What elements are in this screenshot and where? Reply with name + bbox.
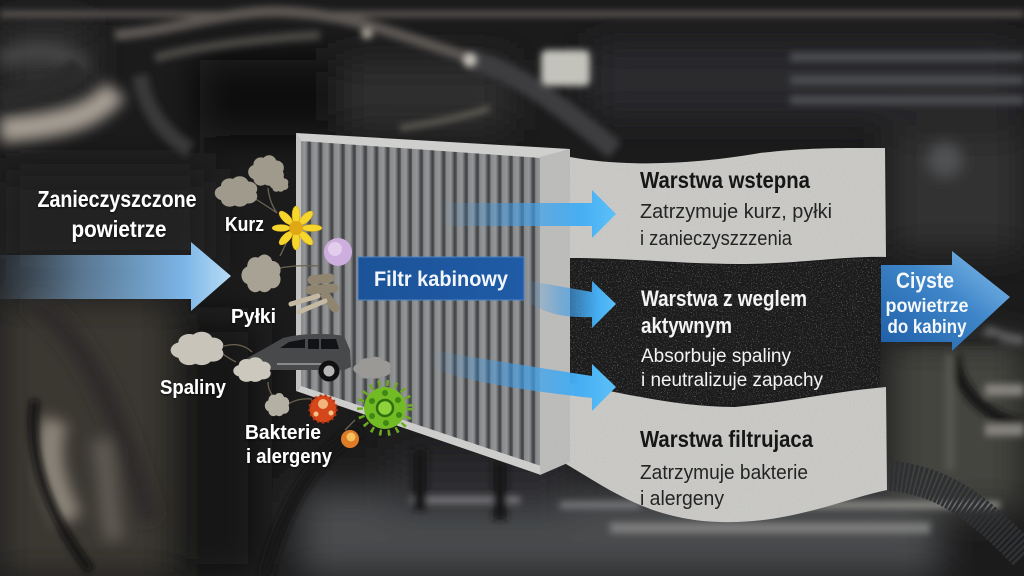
text: pre-filter: Zatrzymuje kurz, pyłki xyxy=(640,201,832,223)
text: filtration: i alergeny xyxy=(640,488,724,510)
icon: orange bacteria xyxy=(310,396,336,422)
filter frame side xyxy=(540,149,570,475)
text: filtration xyxy=(640,426,813,510)
label: dust: Kurz xyxy=(225,214,264,236)
panel: layer stack xyxy=(566,148,887,522)
arrow: clean air to cabin xyxy=(881,251,1010,351)
label: exhaust: Spaliny xyxy=(160,377,227,399)
text: pre-filter xyxy=(640,167,832,250)
filter frame top xyxy=(296,133,570,158)
icon: dust ball xyxy=(241,254,281,292)
heading: polluted air xyxy=(38,186,196,242)
text: pre-filter: i zanieczyszzzenia xyxy=(640,228,793,250)
icon: exhaust cloud xyxy=(171,332,223,365)
panel: filtration layer xyxy=(566,383,887,522)
text: activated carbon: i neutralizuje zapachy xyxy=(641,370,823,391)
connector lines xyxy=(223,188,355,430)
cabin filter xyxy=(296,133,570,475)
icon: green virus xyxy=(360,383,410,433)
arrow: flow to carbon layer xyxy=(524,280,616,328)
icon: dust small xyxy=(265,393,289,416)
icon: car xyxy=(247,334,351,382)
icon: grey exhaust cloud xyxy=(353,357,391,378)
label: allergens: i alergeny xyxy=(246,446,333,468)
arrow: clean air to cabin: do kabiny xyxy=(888,317,967,338)
heading: polluted air: powietrze xyxy=(72,216,166,242)
text: activated carbon: Warstwa z weglem xyxy=(641,286,807,311)
label: bacteria and allergens: Bakterie xyxy=(245,422,321,444)
icon: small allergen xyxy=(341,430,359,448)
arrow: flow to pre-filter xyxy=(440,190,616,238)
icon: yellow flower xyxy=(272,206,322,250)
filter frame bottom xyxy=(296,386,541,475)
text: pre-filter: Warstwa wstepna xyxy=(640,167,810,193)
arrow: polluted air xyxy=(0,242,231,311)
icon: cloud over car front xyxy=(233,357,271,382)
icon: pink pollen xyxy=(324,238,352,266)
panel: activated carbon layer xyxy=(570,258,882,405)
icon: dust xyxy=(215,155,288,207)
filter pleats xyxy=(299,139,541,472)
heading: polluted air: Zanieczyszczone xyxy=(38,186,196,212)
arrow: clean air to cabin: powietrze xyxy=(886,296,968,317)
label: pollen: Pyłki xyxy=(231,306,276,328)
text: filtration: Warstwa filtrujaca xyxy=(640,426,813,452)
text: activated carbon xyxy=(641,286,823,391)
arrow: clean air to cabin: Ciyste xyxy=(896,268,954,293)
text: filtration: Zatrzymuje bakterie xyxy=(640,462,808,484)
contaminant labels xyxy=(160,214,333,468)
text: activated carbon: Absorbuje spaliny xyxy=(641,346,791,367)
arrow: flow to filtration layer xyxy=(430,350,616,411)
panel: pre-filter layer xyxy=(570,148,886,264)
icon: wheat pollen xyxy=(291,278,335,312)
filter frame left xyxy=(296,133,301,391)
badge: Filtr kabinowy xyxy=(358,257,524,300)
wiring loom xyxy=(890,476,1024,555)
badge: Filtr kabinowy: Filtr kabinowy xyxy=(374,268,508,291)
text: activated carbon: aktywnym xyxy=(641,313,732,338)
